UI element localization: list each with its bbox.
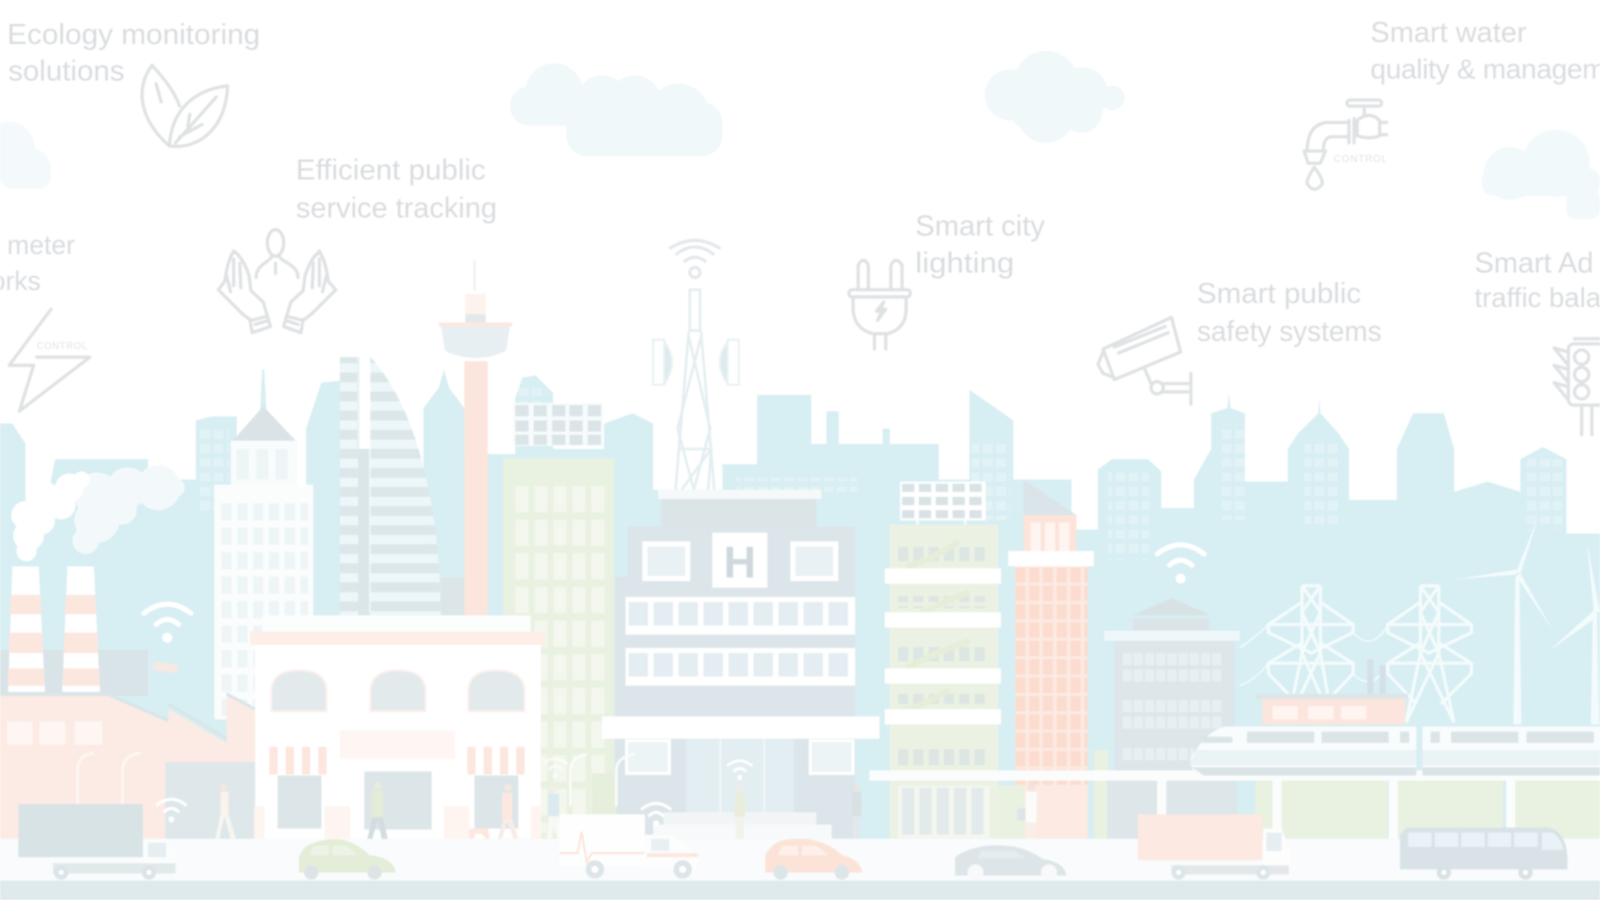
chimneys — [8, 566, 100, 692]
icon: lightning control: CONTROL — [37, 341, 88, 352]
white tower — [214, 406, 313, 719]
cloud: far left — [0, 121, 51, 189]
label: smart ad traffic balancing — [1474, 247, 1600, 313]
canopy — [602, 716, 880, 739]
icon: wifi signal — [670, 240, 719, 278]
person: red dress — [852, 785, 861, 839]
observation tower — [439, 260, 512, 616]
turbine 2 — [1549, 541, 1600, 724]
awnings — [269, 747, 524, 774]
pedestrians — [215, 782, 1037, 839]
factory — [0, 465, 255, 839]
label: smart city lighting: lighting — [915, 247, 1014, 279]
vehicle: green car — [299, 839, 396, 880]
icon: hands and person — [218, 230, 336, 333]
clouds — [0, 51, 1600, 219]
solar panel roof — [900, 482, 986, 529]
H sign — [712, 533, 767, 588]
windows — [645, 544, 836, 579]
label: ecology monitoring — [7, 19, 260, 88]
vehicle: ambulance — [559, 814, 698, 879]
person: dog walker — [469, 784, 518, 839]
person: blue — [547, 785, 562, 839]
balcony bands — [626, 597, 855, 686]
pylon 2 — [1388, 586, 1471, 722]
elevated rail with train — [869, 727, 1600, 839]
window tiles — [898, 547, 990, 765]
pylons and power lines — [1240, 586, 1471, 722]
skyline — [0, 369, 1600, 839]
vehicle: peach truck — [1138, 814, 1291, 880]
icon: lightning control — [9, 309, 90, 411]
label: smart public safety — [1197, 278, 1382, 348]
label: ecology monitoring: Ecology monitoring — [7, 19, 260, 51]
lamps — [78, 753, 141, 806]
substation — [1255, 659, 1408, 724]
icon: water tap control: CONTROL — [1334, 154, 1388, 165]
dock — [165, 762, 255, 839]
label: smart meter networks: meter — [7, 230, 75, 260]
label: smart public safety: safety systems — [1197, 316, 1382, 348]
comm tower with wifi — [653, 240, 739, 490]
person: white coat — [1017, 783, 1037, 839]
windows and door — [278, 771, 518, 830]
wind turbines — [1455, 515, 1600, 724]
tower lattice — [676, 290, 714, 490]
label: efficient public service: service tracking — [296, 192, 497, 224]
person: hospital — [735, 786, 745, 839]
label: smart city lighting: Smart city — [915, 211, 1046, 243]
vehicle: truck grey — [18, 804, 176, 880]
icon: leaves — [142, 65, 228, 146]
road band — [0, 881, 1600, 900]
arched windows — [271, 670, 524, 711]
pillars — [1157, 776, 1515, 839]
label: efficient public service: Efficient public — [296, 155, 486, 187]
hospital — [602, 490, 880, 839]
building — [0, 694, 255, 839]
roof — [233, 406, 296, 441]
cloud: centre right — [985, 51, 1124, 143]
grey blocks under rail — [1107, 781, 1237, 839]
H sign: H — [724, 537, 756, 588]
corner shop — [250, 615, 546, 839]
label: ecology monitoring: solutions — [8, 56, 124, 88]
vehicle: grey car — [955, 845, 1066, 881]
label: smart meter networks — [0, 230, 75, 296]
icon: small cctv — [151, 661, 180, 673]
cloud: centre left — [510, 63, 722, 156]
plant swooshes — [903, 541, 969, 710]
train — [1190, 727, 1600, 776]
label: smart public safety: Smart public — [1197, 278, 1361, 310]
turbine 1 — [1455, 515, 1553, 724]
person: worker — [215, 784, 236, 839]
office with wifi — [1104, 545, 1240, 839]
ground — [0, 839, 1600, 900]
small wifi on street — [157, 799, 670, 827]
icon: traffic light — [1554, 339, 1600, 435]
spire: left — [259, 369, 267, 431]
vehicle: bus — [1400, 828, 1567, 880]
icon: security camera — [1098, 317, 1191, 404]
entrance — [627, 739, 853, 839]
green panels under rail — [1255, 781, 1600, 839]
vehicle: orange car — [765, 839, 862, 880]
green building lower wifi and lamp — [543, 754, 635, 839]
icon: wifi on blue — [144, 604, 191, 643]
label: smart city lighting — [915, 211, 1046, 279]
icon: water tap control — [1304, 100, 1388, 189]
pylon 1 — [1268, 586, 1353, 722]
cloud: far right — [1482, 130, 1600, 219]
solar panel roof — [513, 403, 603, 446]
person: door — [367, 782, 388, 839]
shop sign — [340, 731, 455, 759]
icon: wifi small — [728, 761, 752, 780]
vertical garden building — [885, 482, 1001, 839]
skyline windows — [200, 388, 1562, 559]
sail skyscraper — [340, 357, 464, 615]
label: efficient public service — [296, 155, 497, 224]
label: smart water — [1370, 17, 1600, 85]
power lines — [1240, 624, 1388, 686]
dishes — [653, 340, 739, 385]
green building — [503, 458, 614, 839]
ground floor — [898, 786, 990, 839]
label: smart water: Smart water — [1370, 17, 1527, 49]
label: smart ad traffic balancing: Smart Ad — [1474, 247, 1593, 279]
icon: plug — [849, 260, 910, 349]
smoke — [11, 465, 185, 561]
peach tower — [998, 480, 1108, 839]
sidewalk — [0, 839, 1600, 881]
